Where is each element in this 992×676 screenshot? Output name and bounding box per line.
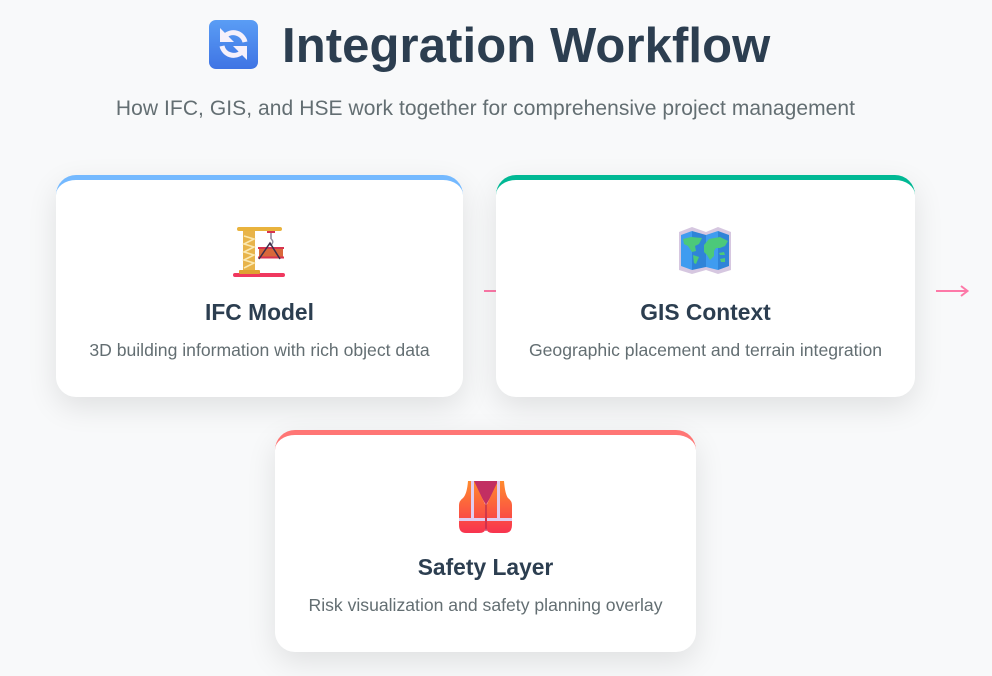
card description: Risk visualization and safety planning overlay xyxy=(308,595,663,615)
subtitle: How IFC, GIS, and HSE work together for comprehensive project management xyxy=(116,97,855,120)
card description: 3D building information with rich object data xyxy=(89,340,430,360)
panel: IFC Model xyxy=(56,175,463,397)
icon: refresh arrows xyxy=(209,20,258,69)
card title: IFC Model xyxy=(205,299,314,325)
icon: safety vest xyxy=(459,481,512,533)
title xyxy=(209,19,770,73)
arrow: GIS onward xyxy=(936,285,969,297)
card description: Geographic placement and terrain integration xyxy=(529,340,882,360)
icon: construction crane xyxy=(233,227,285,277)
icon: world map xyxy=(679,227,731,274)
panel: GIS Context xyxy=(496,175,915,397)
panel: Safety Layer xyxy=(275,430,696,652)
arrow: IFC to GIS xyxy=(484,290,496,292)
heading text: Integration Workflow xyxy=(282,19,770,73)
card title: Safety Layer xyxy=(418,554,553,580)
card title: GIS Context xyxy=(640,299,771,325)
